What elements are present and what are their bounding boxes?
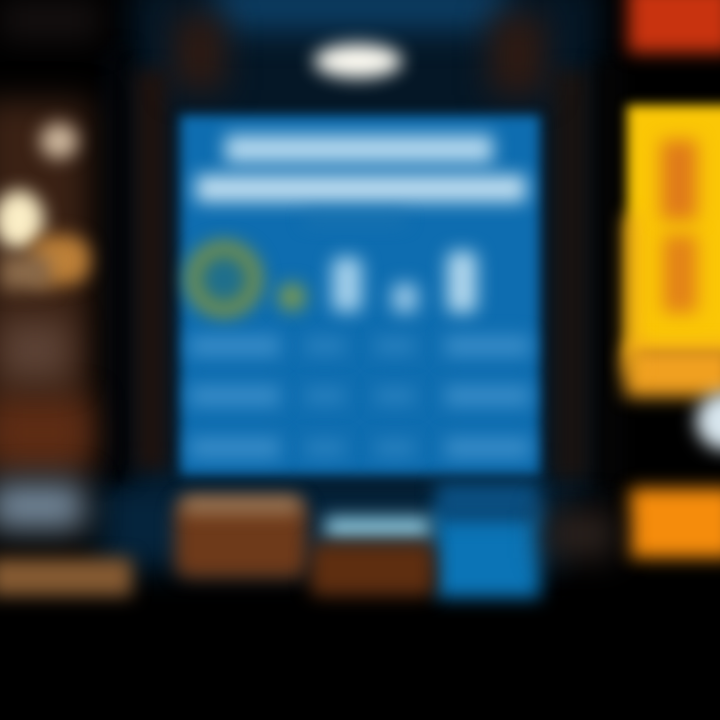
- left dark pillar: [100, 50, 130, 480]
- icon: figure 2: [392, 283, 418, 313]
- yellow body: [627, 105, 720, 355]
- row 2 cell 3: [375, 388, 415, 404]
- white round object: [696, 392, 720, 450]
- left poster lower warm band: [0, 400, 90, 465]
- ceiling lamp: [314, 44, 402, 78]
- left poster tan patch: [0, 255, 50, 290]
- background: dark navy top centre: [130, 0, 600, 500]
- top glow: [215, 0, 505, 30]
- table row 1: [180, 328, 540, 364]
- row 2 cell 2: [305, 388, 345, 404]
- bottom brown object 1 highlight: [182, 497, 300, 513]
- row 3 cell 2: [305, 440, 345, 456]
- icon: figure 1: [332, 257, 362, 312]
- row 3 cell 3: [375, 440, 415, 456]
- panel: left poster: [0, 84, 112, 485]
- row 2 cell 4: [445, 386, 530, 406]
- right brown column: [552, 70, 592, 480]
- bottom centre blue panel: [436, 510, 540, 598]
- red text block 1: [661, 140, 697, 220]
- row 1 cell 3: [375, 338, 415, 354]
- top left decor: [0, 0, 100, 40]
- icon: small green mark: [278, 283, 306, 311]
- left poster body: [0, 100, 90, 470]
- panel: right orange sign: [630, 488, 720, 558]
- bottom left tan block: [0, 558, 132, 596]
- left poster light spot: [40, 123, 78, 159]
- icon: figure 3: [447, 251, 477, 313]
- heading line 2: [196, 175, 526, 202]
- bottom brown object 2: [310, 542, 434, 596]
- yellow poster left edge: [625, 215, 637, 375]
- row 1 cell 2: [305, 338, 345, 354]
- left poster mid tone: [0, 320, 70, 380]
- row 2 cell 1: [190, 386, 280, 406]
- row 1 cell 1: [190, 336, 280, 356]
- panel: central blue poster: [171, 106, 549, 484]
- blue poster body: [180, 115, 540, 475]
- bottom centre blue panel upper: [436, 482, 540, 522]
- yellow poster lower band: [625, 345, 720, 397]
- panel: top right red sign: [628, 0, 720, 53]
- top left brown decor: [175, 15, 225, 90]
- heading line 1: [225, 135, 493, 163]
- row 3 cell 4: [445, 438, 530, 458]
- background: lower navy band: [100, 480, 560, 570]
- icon: ring chart: [186, 241, 262, 317]
- red text block 2: [663, 235, 697, 313]
- row 1 cell 4: [445, 336, 530, 356]
- bottom brown object 1: [175, 500, 307, 578]
- bottom left blue grey block: [0, 482, 85, 530]
- panel: right yellow poster: [608, 94, 720, 412]
- bottom light blue strip: [325, 517, 430, 539]
- top right brown decor: [490, 15, 545, 95]
- subheading: [305, 215, 405, 223]
- table row 2: [180, 378, 540, 414]
- bottom right dim object: [545, 510, 615, 558]
- row 3 cell 1: [190, 438, 280, 458]
- left poster orange glow: [30, 235, 90, 285]
- left brown column: [135, 70, 167, 470]
- right dark pillar: [595, 60, 625, 490]
- left poster glow: [0, 190, 44, 250]
- table row 3: [180, 430, 540, 466]
